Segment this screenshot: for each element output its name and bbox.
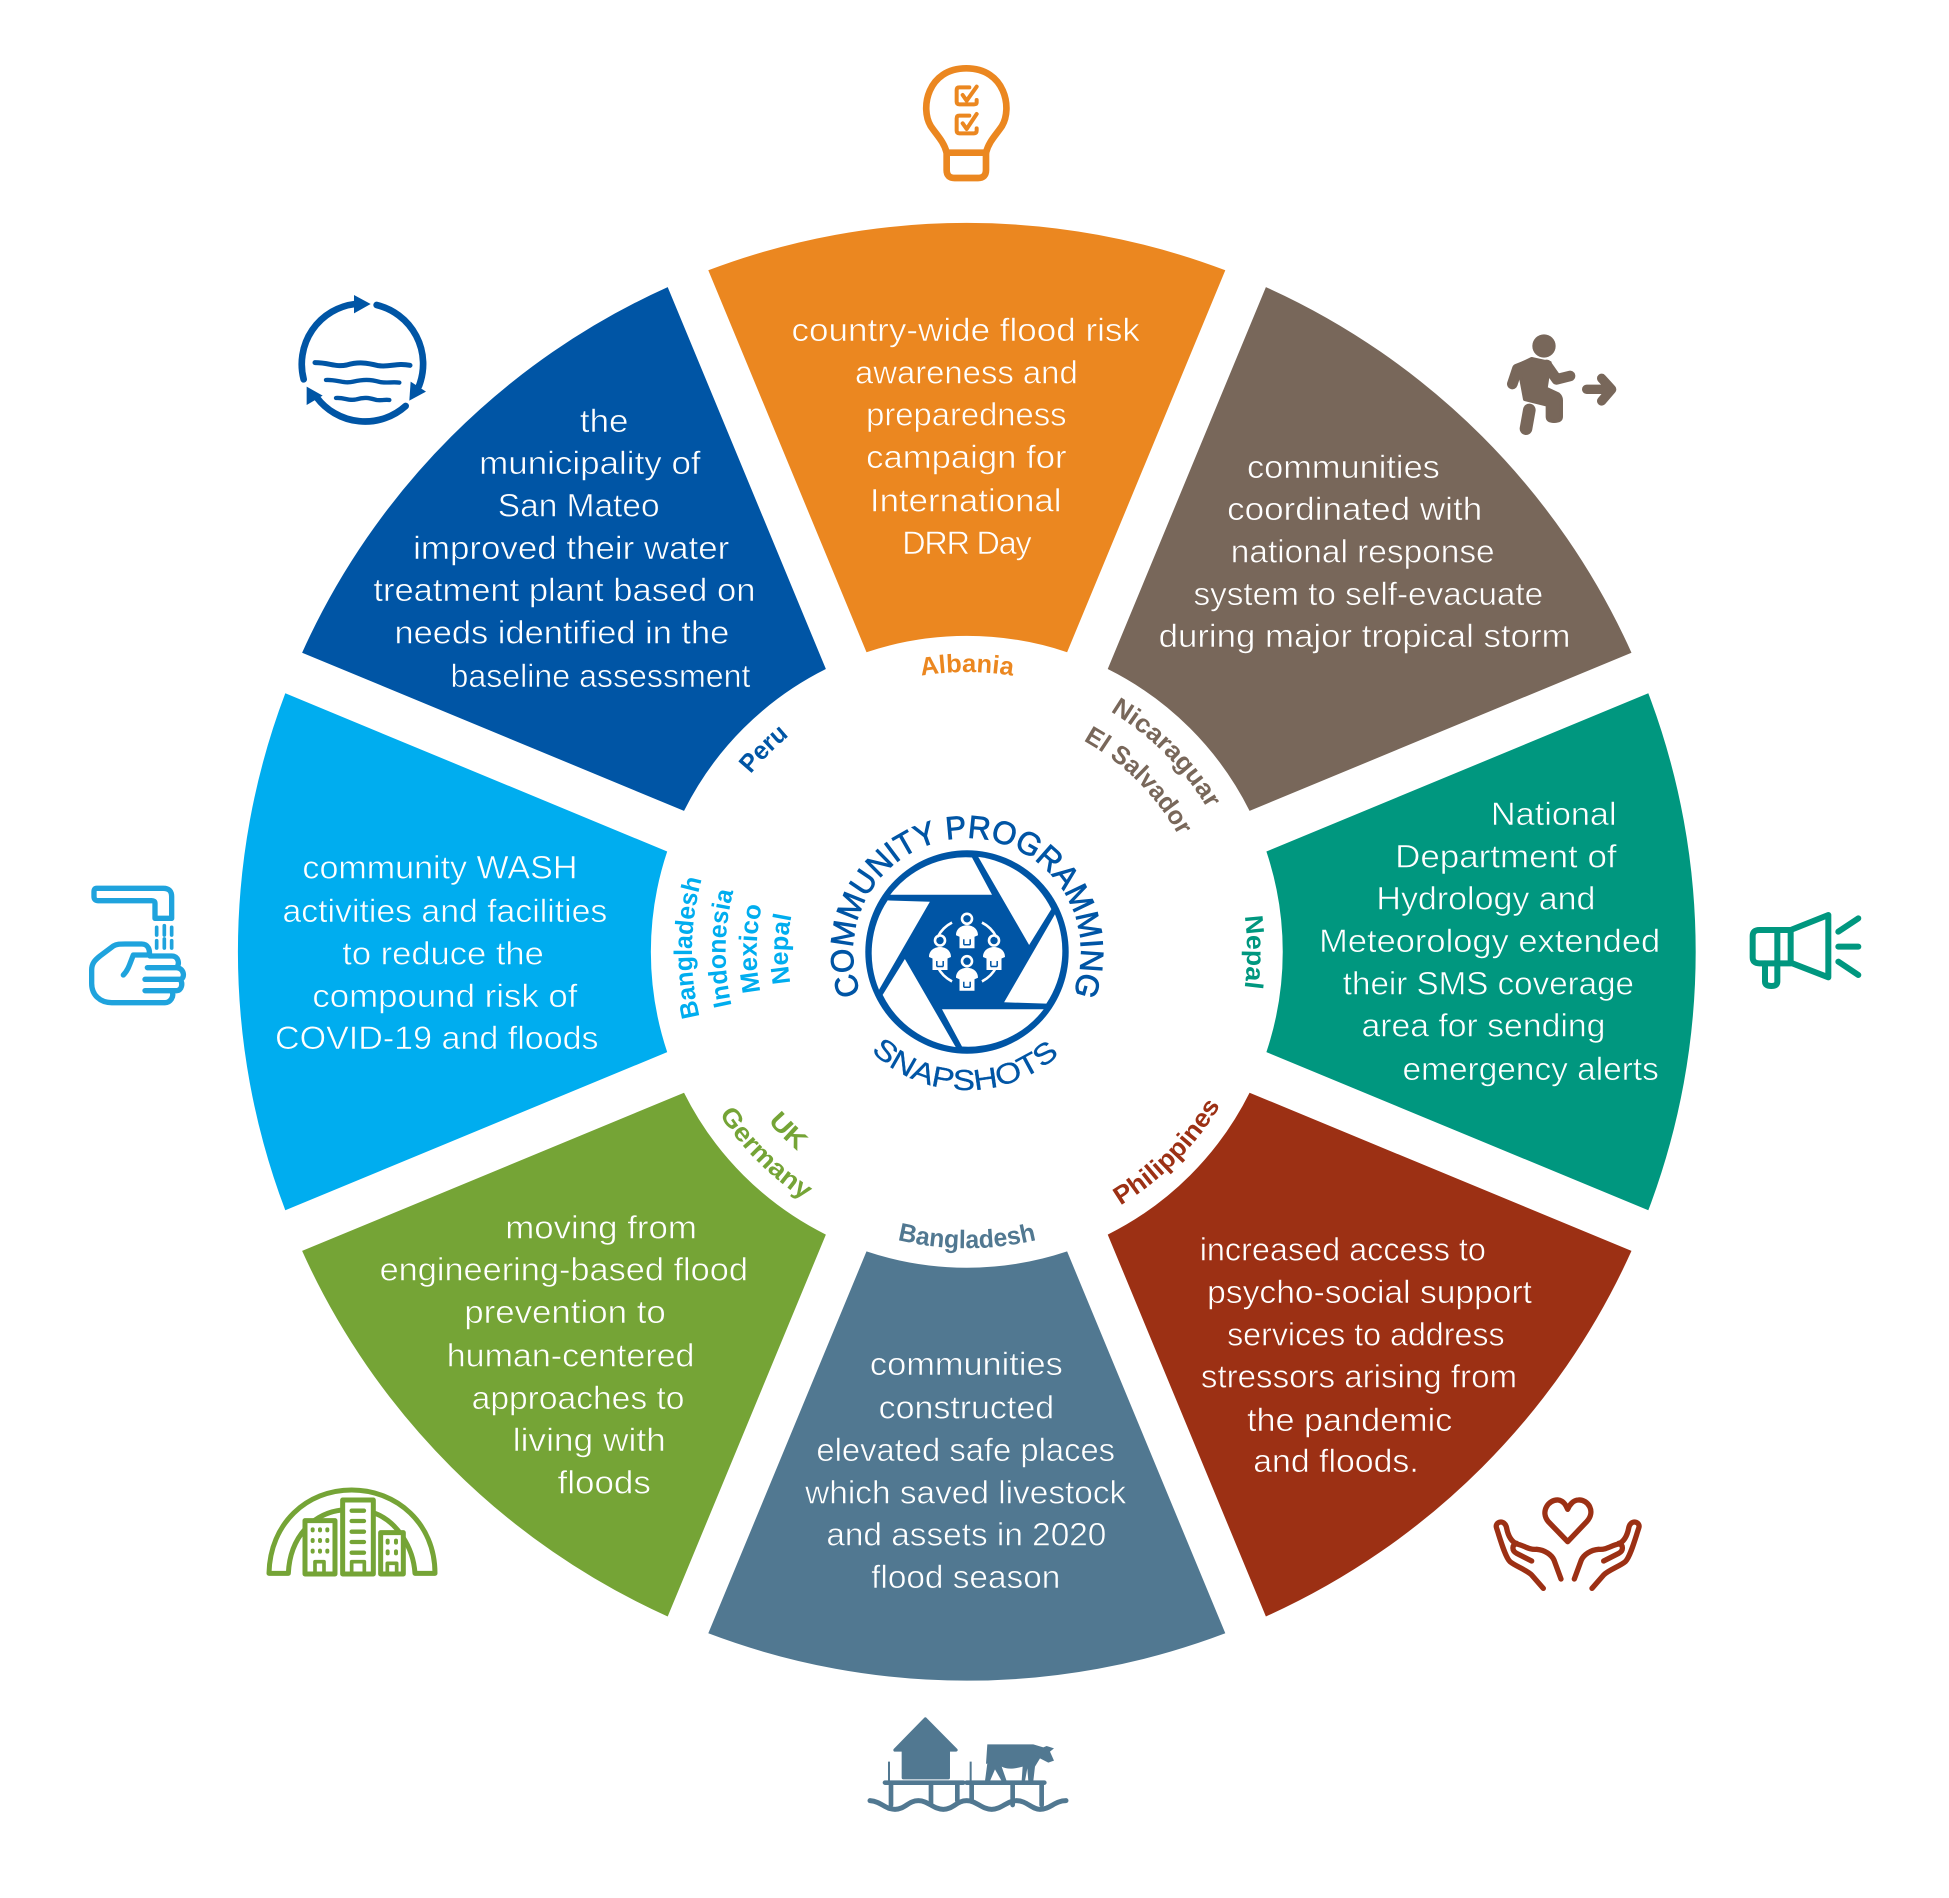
country label: Bangladesh, Indonesia, Mexico, Nepal: Indonesia (708, 890, 734, 1008)
panel: Philippines psycho-social support: the pandemic (1247, 1402, 1452, 1438)
emblem aperture blades (847, 838, 1087, 1066)
panel: Albania awareness campaign: country-wide flood risk (792, 312, 1141, 348)
panel: Peru water treatment plant: baseline assessment (451, 658, 750, 694)
icon: running person with arrow (1512, 334, 1612, 429)
country label: UK and Germany: UK (772, 1110, 809, 1151)
panel: Philippines psycho-social support: services to address (1227, 1316, 1505, 1352)
panel: Albania awareness campaign (708, 223, 1225, 652)
panel: Peru water treatment plant: San Mateo (498, 487, 660, 523)
country label: Nicaraguar and El Salvador: Nicaraguar (1112, 698, 1219, 805)
country label: Philippines: Philippines (1112, 1100, 1218, 1205)
icon: hand washing under tap (92, 888, 183, 1003)
panel: Nicaragua and El Salvador self-evacuation: communities (1247, 449, 1440, 485)
panel: UK and Germany human-centered approaches: approaches to (472, 1380, 684, 1416)
panel: Philippines psycho-social support (996, 981, 1665, 1650)
panel: Nepal SMS alerts: Meteorology extended (1319, 923, 1660, 959)
panel: community WASH activities: activities and facilities (283, 893, 607, 929)
panel: Bangladesh elevated safe places: communities (870, 1346, 1063, 1382)
panel: community WASH activities: COVID-19 and floods (275, 1020, 599, 1056)
panel: Nicaragua and El Salvador self-evacuation: coordinated with (1227, 491, 1482, 527)
country label: Nicaraguar and El Salvador: El Salvador (1084, 726, 1190, 832)
panel: Nepal SMS alerts: emergency alerts (1403, 1051, 1659, 1087)
panel: Albania awareness campaign: International (870, 482, 1062, 518)
panel: Philippines psycho-social support: stressors arising from (1201, 1359, 1517, 1395)
icon: house and cow on raised platform (870, 1719, 1066, 1809)
panel: UK and Germany human-centered approaches: moving from (505, 1209, 697, 1245)
panel: Bangladesh elevated safe places: which saved livestock (804, 1474, 1127, 1510)
panel: UK and Germany human-centered approaches: floods (558, 1464, 651, 1500)
panel: Nepal SMS alerts: Department of (1395, 838, 1618, 874)
panel: Peru water treatment plant: improved their water (413, 530, 730, 566)
panel: Nepal SMS alerts: National (1491, 796, 1617, 832)
panel: community WASH activities: to reduce the (342, 935, 544, 971)
panel: Bangladesh elevated safe places: constructed (879, 1390, 1054, 1426)
emblem: community programming snapshots (830, 815, 1104, 1090)
emblem title arc: COMMUNITY PROGRAMMING (830, 815, 1104, 997)
panel: Nepal SMS alerts: area for sending (1361, 1008, 1605, 1044)
country label: Bangladesh, Indonesia, Mexico, Nepal (674, 878, 794, 1019)
panel: Philippines psycho-social support: increased access to (1200, 1232, 1486, 1268)
panel: Nepal SMS alerts (1266, 693, 1696, 1210)
panel: Philippines psycho-social support: and floods. (1253, 1443, 1419, 1479)
country label: Albania: Albania (922, 654, 1014, 676)
icon: megaphone (1753, 915, 1858, 986)
panel: Nicaragua and El Salvador self-evacuation: system to self-evacuate (1193, 576, 1543, 612)
panel: Bangladesh elevated safe places: flood season (871, 1559, 1060, 1595)
panel: community WASH activities (238, 693, 667, 1210)
icon: light bulb with checklist (926, 68, 1006, 178)
country label: Bangladesh, Indonesia, Mexico, Nepal: Mexico (738, 905, 761, 993)
panel: Peru water treatment plant: needs identified in the (395, 614, 729, 650)
panel: Nicaragua and El Salvador self-evacuation (996, 254, 1665, 923)
panel: Albania awareness campaign: preparedness (866, 397, 1067, 433)
panel: Bangladesh elevated safe places: elevated safe places (816, 1432, 1115, 1468)
country label: Peru: Peru (738, 726, 788, 773)
panel: Nepal SMS alerts: Hydrology and (1376, 881, 1595, 917)
country label: UK and Germany: Germany (722, 1108, 812, 1199)
panel: UK and Germany human-centered approaches: engineering-based flood (380, 1252, 748, 1288)
panel: Bangladesh elevated safe places (708, 1251, 1225, 1681)
panel: UK and Germany human-centered approaches: living with (513, 1422, 666, 1458)
panel: Peru water treatment plant: treatment plant based on (373, 572, 755, 608)
panel: Albania awareness campaign: awareness and (855, 354, 1078, 390)
country label: Nicaraguar and El Salvador (1084, 698, 1219, 832)
panel: UK and Germany human-centered approaches: human-centered (447, 1337, 694, 1373)
icon: water cycle (302, 295, 426, 422)
panel: Nepal SMS alerts: their SMS coverage (1343, 965, 1634, 1001)
emblem subtitle arc: SNAPSHOTS (874, 1040, 1056, 1090)
country label: Bangladesh: Bangladesh (899, 1223, 1035, 1254)
emblem people icon (929, 914, 1005, 991)
panel: Peru water treatment plant (269, 254, 938, 923)
panel: community WASH activities: community WASH (302, 850, 577, 886)
panel: community WASH activities: compound risk of (312, 978, 579, 1014)
panel: Albania awareness campaign: DRR Day (902, 525, 1033, 561)
panel: Nicaragua and El Salvador self-evacuation: during major tropical storm (1159, 618, 1571, 654)
panel: Philippines psycho-social support: psycho-social support (1207, 1274, 1532, 1310)
country label: Bangladesh, Indonesia, Mexico, Nepal: Nepal (770, 914, 794, 984)
icon: city under a dome (269, 1490, 435, 1574)
icon: hands holding heart (1496, 1500, 1639, 1588)
country label: Bangladesh, Indonesia, Mexico, Nepal: Bangladesh (674, 878, 702, 1019)
panel: UK and Germany human-centered approaches (269, 981, 938, 1650)
panel: Bangladesh elevated safe places: and assets in 2020 (826, 1517, 1106, 1553)
panel: UK and Germany human-centered approaches: prevention to (464, 1294, 666, 1330)
emblem disc (865, 850, 1069, 1054)
panel: Albania awareness campaign: campaign for (866, 439, 1067, 475)
panel: Nicaragua and El Salvador self-evacuation: national response (1231, 534, 1495, 570)
panel: Peru water treatment plant: municipality of (479, 445, 702, 481)
country label: Nepal: Nepal (1242, 916, 1264, 988)
panel: Peru water treatment plant: the (580, 403, 628, 439)
